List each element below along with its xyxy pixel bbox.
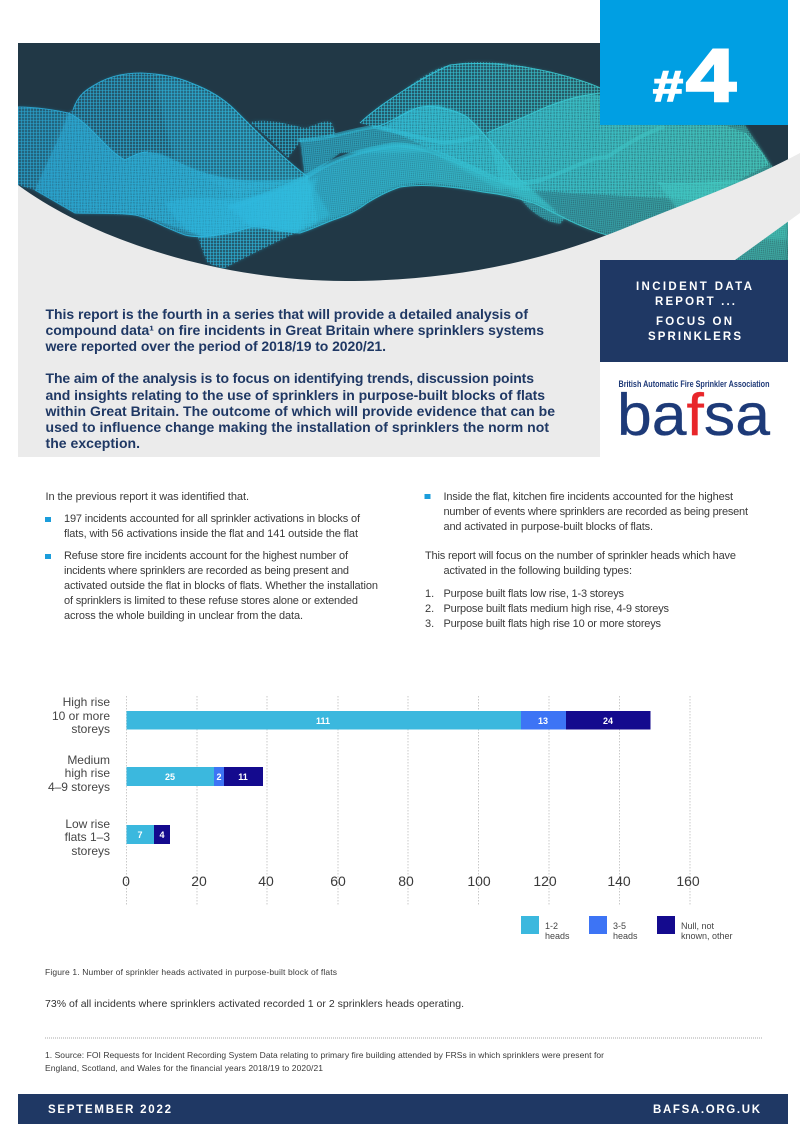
gridlines [126, 696, 690, 905]
bullet: 197 incidents [45, 513, 361, 540]
category labels: High rise [63, 695, 110, 709]
category labels [48, 695, 110, 858]
report title box: FOCUS ON [656, 316, 732, 328]
category labels: flats 1–3 [65, 830, 110, 844]
building types list: Purpose built flats medium high rise, 4-9 storeys [444, 603, 670, 615]
bullet: kitchen fires: Inside the flat, kitchen fire incidents accounted for the highest [444, 491, 733, 503]
intro heading text: The aim of the analysis is to focus on identifying trends, discussion points [46, 370, 534, 386]
bullet: refuse store: of sprinklers is limited to these refuse stores alone or extended [64, 595, 358, 607]
intro heading text: within Great Britain. The outcome of which will provide evidence that can be [44, 403, 555, 419]
report title box [600, 260, 788, 362]
intro heading text: used to influence change making the installation of sprinklers the norm not [46, 419, 549, 435]
bullet: 197 incidents: flats, with 56 activations inside the flat and 141 outside the flat [64, 528, 358, 540]
x axis labels: 60 [330, 873, 346, 889]
issue number box: 4 [686, 34, 736, 117]
stacked bar chart [48, 695, 733, 941]
building types list: Purpose built flats high rise 10 or more storeys [444, 618, 662, 630]
report title box: INCIDENT DATA [636, 281, 752, 293]
bullet: refuse store: activated outside the flat in blocks of flats. Whether the installation [64, 580, 378, 592]
legend: known, other [681, 931, 733, 941]
building types list: 3. [425, 618, 434, 630]
building types list [425, 588, 670, 630]
x axis labels [122, 873, 700, 889]
intro heading text: and insights relating to the use of sprinklers in purpose-built blocks of flats [46, 387, 545, 403]
building types list: Purpose built flats low rise, 1-3 storeys [444, 588, 624, 600]
legend: 1-2 [545, 921, 558, 931]
footnote source [45, 1050, 604, 1073]
bar: low rise: 7 [137, 830, 143, 840]
building types list: 1. [425, 588, 434, 600]
report title box: SPRINKLERS [648, 331, 741, 343]
bullet: kitchen fires: number of events where sprinklers are recorded as being present [444, 506, 748, 518]
footnote source: England, Scotland, and Wales for the financial years 2018/19 to 2020/21 [45, 1063, 323, 1073]
footer bar: BAFSA.ORG.UK [653, 1104, 761, 1116]
legend: heads [545, 931, 570, 941]
bullet: refuse store: Refuse store fire incidents account for the highest number of [64, 550, 349, 562]
right column body text: activated in the following building types: [444, 565, 632, 577]
legend: heads [613, 931, 638, 941]
wave mesh graphic [18, 62, 788, 268]
legend: Null, not [681, 921, 715, 931]
footnote source: 1. Source: FOI Requests for Incident Recording System Data relating to primary fire building attended by FRSs in which sprinklers were present for [45, 1050, 604, 1060]
grey background with curved top and diagonal band [18, 153, 800, 457]
bar: medium high rise: 2 [216, 772, 222, 782]
category labels: Medium [67, 753, 110, 767]
category labels: storeys [71, 844, 110, 858]
legend: 3-5 [613, 921, 626, 931]
right column body text: This report will focus on the number of sprinkler heads which have [425, 550, 736, 562]
bullet: refuse store: incidents where sprinklers are recorded as being present and [64, 565, 349, 577]
bar: high rise: 24 [603, 716, 613, 726]
left column body text: In the previous report it was identified that. [46, 491, 249, 503]
x axis labels: 100 [467, 873, 491, 889]
intro heading text: the exception. [46, 435, 140, 451]
x axis labels: 40 [258, 873, 274, 889]
footer bar: SEPTEMBER 2022 [48, 1104, 171, 1116]
report title box: REPORT ... [655, 296, 735, 308]
x axis labels: 80 [398, 873, 414, 889]
bafsa logo: bafsa [617, 382, 770, 448]
category labels: storeys [71, 722, 110, 736]
intro heading text [44, 306, 555, 451]
intro heading text: compound data¹ on fire incidents in Great Britain where sprinklers systems [46, 322, 544, 338]
figure caption: Figure 1. Number of sprinkler heads activated in purpose-built block of flats [45, 967, 337, 977]
soft bright bands [230, 127, 663, 207]
footer bar [18, 1094, 788, 1124]
category labels: 10 or more [52, 709, 110, 723]
x axis labels: 160 [676, 873, 700, 889]
bar: low rise [126, 825, 170, 844]
issue number box [600, 0, 788, 125]
x axis labels: 120 [533, 873, 557, 889]
bar: medium high rise: 11 [238, 772, 248, 782]
x axis labels: 20 [191, 873, 207, 889]
left column body text [45, 491, 378, 622]
intro heading text: were reported over the period of 2018/19 to 2020/21. [44, 338, 386, 354]
key finding statement: 73% of all incidents where sprinklers activated recorded 1 or 2 sprinklers heads operating. [45, 998, 464, 1010]
right column body text [424, 491, 748, 630]
bullet: 197 incidents: 197 incidents accounted for all sprinkler activations in blocks of [64, 513, 361, 525]
bar: low rise: 4 [159, 830, 165, 840]
category labels: Low rise [65, 817, 110, 831]
wave ridge lines [18, 63, 786, 236]
x axis labels: 0 [122, 873, 130, 889]
bar: medium high rise: 25 [165, 772, 175, 782]
intro heading text: This report is the fourth in a series that will provide a detailed analysis of [46, 306, 528, 322]
bullet: refuse store: across the whole building in unclear from the data. [64, 610, 303, 622]
building types list: 2. [425, 603, 434, 615]
bullet: refuse store [45, 550, 378, 622]
bar: high rise: 111 [316, 716, 330, 726]
bar: medium high rise [126, 767, 263, 786]
legend [521, 916, 733, 941]
hero banner with wave mesh [18, 43, 800, 457]
bullet: kitchen fires [424, 491, 748, 533]
category labels: high rise [65, 766, 110, 780]
category labels: 4–9 storeys [48, 780, 110, 794]
issue number box: # [653, 62, 683, 111]
bullet: kitchen fires: and activated in purpose-built blocks of flats. [444, 521, 653, 533]
bar: high rise [126, 711, 650, 730]
x axis labels: 140 [607, 873, 631, 889]
bar: high rise: 13 [538, 716, 548, 726]
